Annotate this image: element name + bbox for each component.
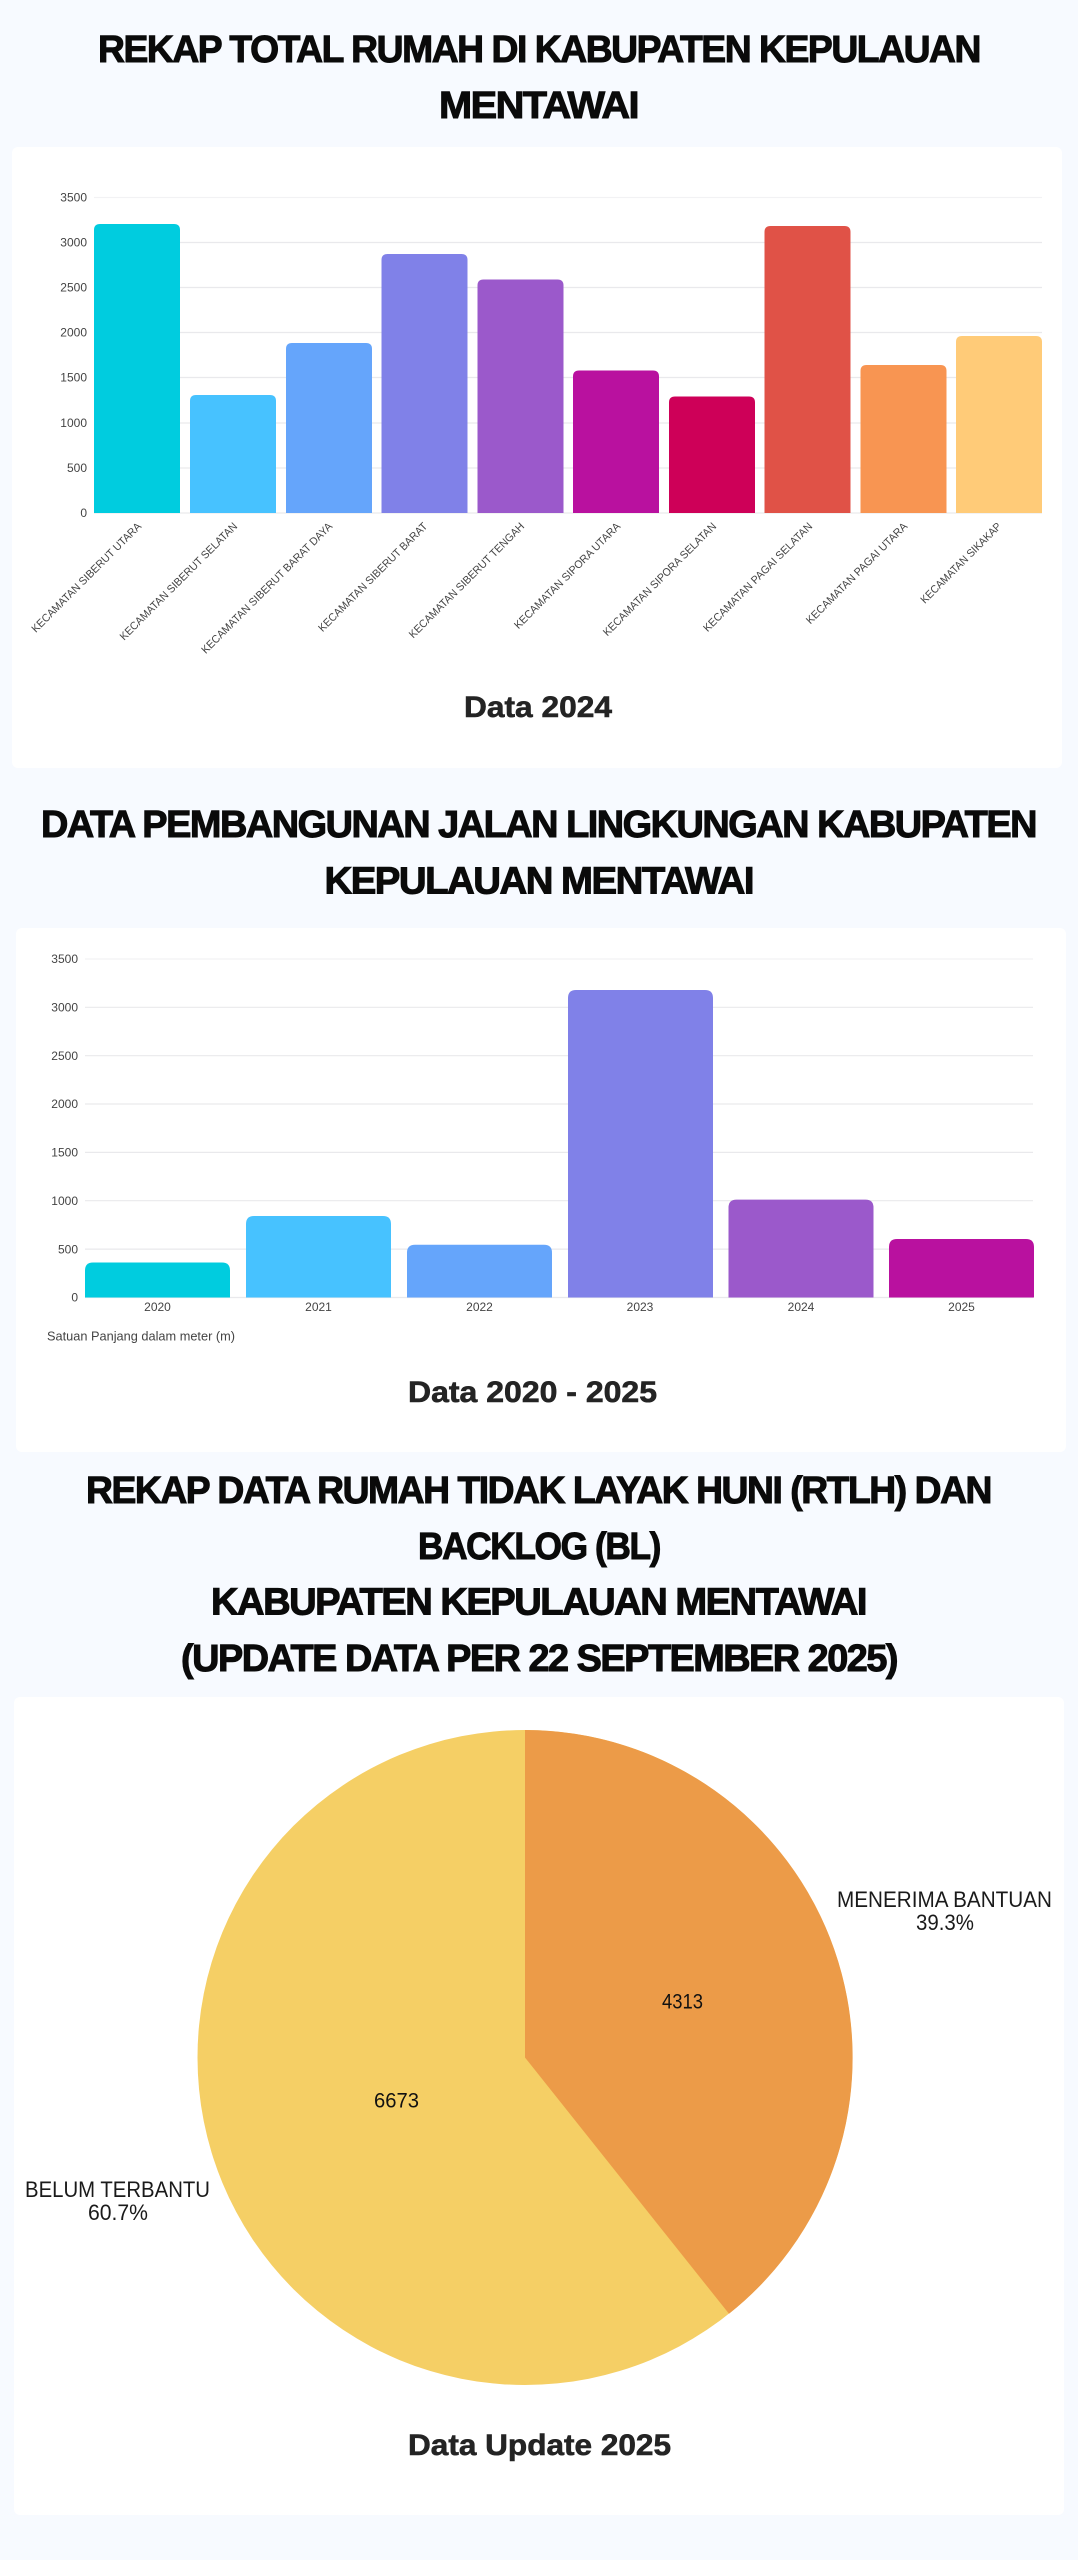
title: rekap total rumah: REKAP TOTAL RUMAH DI KABUPATEN KEPULAUAN bbox=[98, 29, 980, 71]
title: pembangunan jalan lingkungan: KEPULAUAN MENTAWAI bbox=[324, 860, 753, 902]
bar chart: panjang jalan per tahun bbox=[51, 952, 1034, 1314]
title: rekap RTLH dan backlog: KABUPATEN KEPULAUAN MENTAWAI bbox=[211, 1582, 866, 1624]
bar chart: total rumah per kecamatan: KECAMATAN SIPORA UTARA bbox=[512, 520, 624, 632]
title: pembangunan jalan lingkungan: DATA PEMBANGUNAN JALAN LINGKUNGAN KABUPATEN bbox=[41, 804, 1036, 846]
bar chart: total rumah per kecamatan: KECAMATAN SIBERUT TENGAH bbox=[407, 521, 527, 641]
bar chart: total rumah per kecamatan: KECAMATAN SIPORA SELATAN bbox=[601, 521, 719, 639]
pie label: belum terbantu: BELUM TERBANTU bbox=[25, 2177, 210, 2202]
bar chart: panjang jalan per tahun: 2021 bbox=[305, 1300, 332, 1314]
bar chart: panjang jalan per tahun: 3000 bbox=[51, 1000, 78, 1014]
panel: jalan lingkungan 2020-2025 bbox=[16, 928, 1066, 1452]
bar chart: panjang jalan per tahun: 0 bbox=[71, 1290, 78, 1304]
bar chart: total rumah per kecamatan: KECAMATAN SIKAKAP bbox=[919, 521, 1004, 606]
chart caption: data 2020-2025: Data 2020 - 2025 bbox=[408, 1376, 657, 1409]
chart caption: data 2024: Data 2024 bbox=[464, 691, 612, 724]
pie label: menerima bantuan: 39.3% bbox=[916, 1910, 974, 1935]
bar chart: total rumah per kecamatan: KECAMATAN SIBERUT BARAT DAYA bbox=[199, 520, 336, 656]
bar chart: total rumah per kecamatan: 2500 bbox=[60, 280, 87, 294]
bar chart: total rumah per kecamatan: KECAMATAN PAGAI UTARA bbox=[804, 520, 911, 627]
title: rekap RTLH dan backlog: (UPDATE DATA PER 22 SEPTEMBER 2025) bbox=[181, 1638, 897, 1680]
bar chart: total rumah per kecamatan: 500 bbox=[67, 461, 87, 475]
panel: total rumah 2024 bbox=[12, 147, 1062, 768]
panel: RTLH pie bbox=[14, 1697, 1064, 2515]
bar chart: total rumah per kecamatan: KECAMATAN SIBERUT BARAT bbox=[316, 520, 430, 634]
bar chart: panjang jalan per tahun: 2024 bbox=[788, 1300, 815, 1314]
title: rekap RTLH dan backlog: REKAP DATA RUMAH TIDAK LAYAK HUNI (RTLH) DAN bbox=[86, 1470, 991, 1512]
bar chart: total rumah per kecamatan bbox=[30, 190, 1042, 656]
bar chart: total rumah per kecamatan: 0 bbox=[80, 506, 87, 520]
bar chart: panjang jalan per tahun: 1000 bbox=[51, 1194, 78, 1208]
bar chart: panjang jalan per tahun: 1500 bbox=[51, 1146, 78, 1160]
bar chart: panjang jalan per tahun: 2023 bbox=[627, 1300, 654, 1314]
bar chart: total rumah per kecamatan: KECAMATAN SIBERUT SELATAN bbox=[118, 521, 240, 643]
pie label: belum terbantu bbox=[25, 2177, 210, 2225]
pie chart: status bantuan: 4313 bbox=[662, 1990, 703, 2014]
pie label: belum terbantu: 60.7% bbox=[88, 2200, 148, 2225]
bar chart: panjang jalan per tahun: 3500 bbox=[51, 952, 78, 966]
title: rekap RTLH dan backlog: BACKLOG (BL) bbox=[418, 1526, 660, 1568]
title: rekap total rumah: MENTAWAI bbox=[439, 85, 638, 127]
title: pembangunan jalan lingkungan bbox=[41, 804, 1036, 902]
pie label: menerima bantuan bbox=[837, 1887, 1052, 1935]
pie chart: status bantuan: 6673 bbox=[374, 2090, 419, 2112]
bar chart: total rumah per kecamatan: KECAMATAN PAGAI SELATAN bbox=[701, 521, 815, 634]
bar chart: panjang jalan per tahun: 2022 bbox=[466, 1300, 493, 1314]
bar chart: total rumah per kecamatan: 1500 bbox=[60, 370, 87, 384]
chart caption: data update 2025: Data Update 2025 bbox=[408, 2429, 671, 2462]
bar chart: panjang jalan per tahun: 2000 bbox=[51, 1097, 78, 1111]
pie chart: status bantuan bbox=[198, 1730, 853, 2385]
bar chart: total rumah per kecamatan: 2000 bbox=[60, 326, 87, 340]
bar chart: total rumah per kecamatan: 3500 bbox=[60, 190, 87, 204]
pie label: menerima bantuan: MENERIMA BANTUAN bbox=[837, 1887, 1052, 1912]
unit note: Satuan Panjang dalam meter (m) bbox=[47, 1328, 235, 1344]
bar chart: panjang jalan per tahun: 2020 bbox=[144, 1300, 171, 1314]
bar chart: total rumah per kecamatan: KECAMATAN SIBERUT UTARA bbox=[30, 520, 145, 635]
bar chart: panjang jalan per tahun: 500 bbox=[58, 1242, 78, 1256]
bar chart: panjang jalan per tahun: 2500 bbox=[51, 1049, 78, 1063]
title: rekap RTLH dan backlog bbox=[86, 1470, 991, 1680]
bar chart: total rumah per kecamatan: 3000 bbox=[60, 236, 87, 250]
bar chart: panjang jalan per tahun: 2025 bbox=[948, 1300, 975, 1314]
bar chart: total rumah per kecamatan: 1000 bbox=[60, 416, 87, 430]
title: rekap total rumah bbox=[98, 29, 980, 127]
